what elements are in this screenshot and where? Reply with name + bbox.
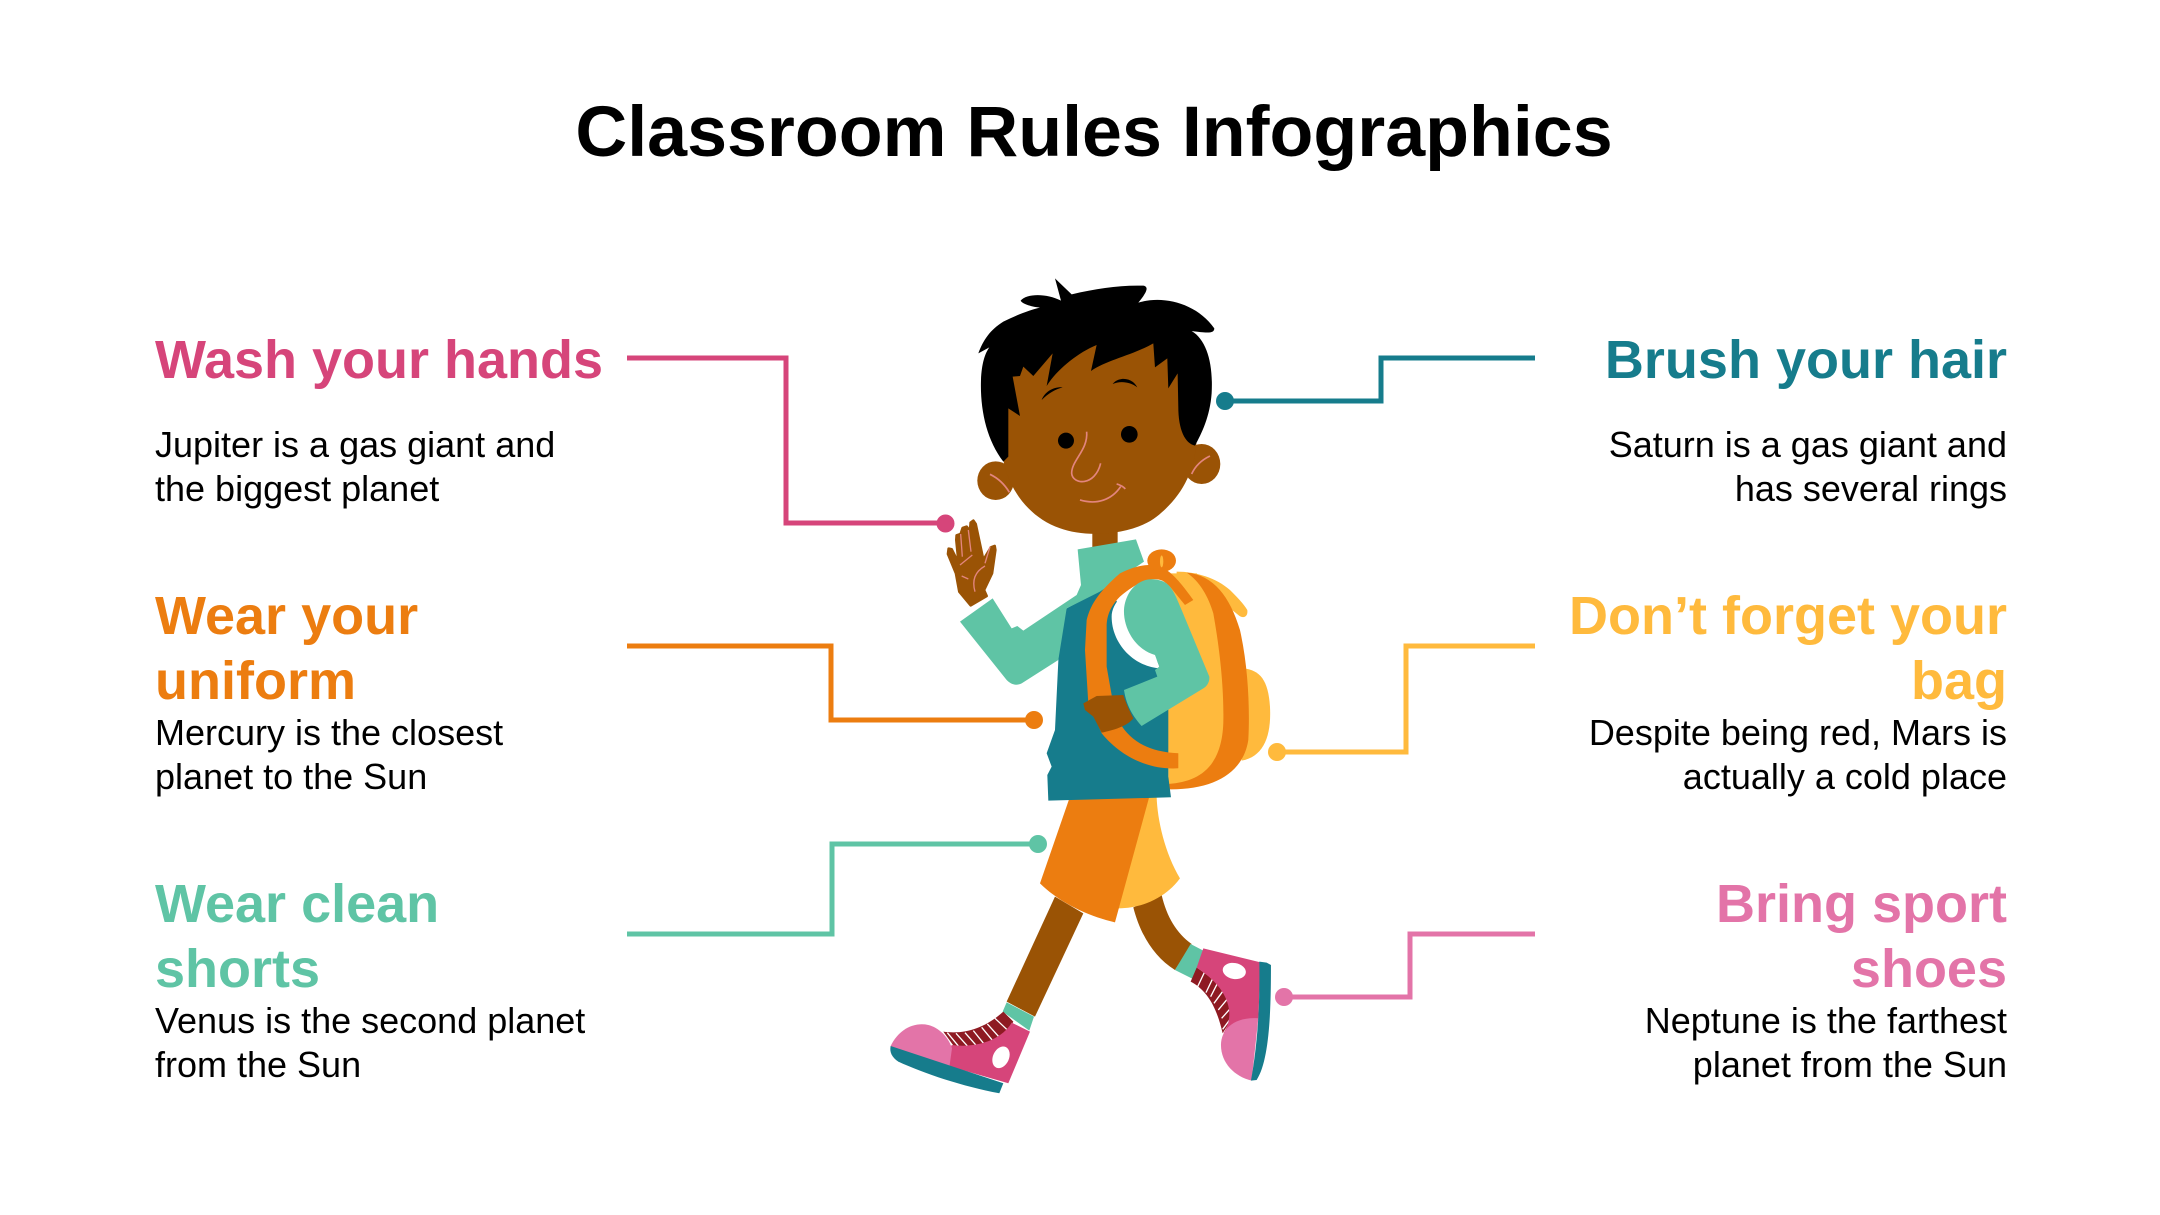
panel: wear your uniform — [155, 586, 503, 797]
text: mars: Despite being red, Mars is — [1589, 712, 2007, 753]
front socks — [1003, 1002, 1034, 1031]
illustration: walking boy with backpack — [890, 278, 1271, 1093]
panel: wear clean shorts — [155, 874, 585, 1085]
nose — [1072, 432, 1101, 482]
panel: wash your hands — [155, 330, 603, 509]
connector: uniform to vest — [627, 646, 1043, 729]
heading: brush your hair: Brush your hair — [1605, 330, 2007, 390]
heading: don't forget your bag: Don’t forget your — [1569, 586, 2007, 646]
back shoe — [1191, 948, 1271, 1081]
heading: wear clean shorts: shorts — [155, 939, 320, 999]
back leg — [1133, 895, 1192, 970]
connector: brush hair — [1216, 358, 1535, 410]
panel: bring sport shoes — [1645, 874, 2007, 1085]
text: saturn: Saturn is a gas giant and — [1609, 424, 2007, 465]
text: mercury: planet to the Sun — [155, 756, 427, 797]
front hand — [1083, 695, 1133, 733]
eyebrows — [1042, 379, 1137, 400]
face — [1003, 340, 1197, 534]
panel: don't forget your bag — [1569, 586, 2007, 797]
hair — [978, 278, 1214, 462]
eyes — [1058, 433, 1074, 449]
text: saturn: has several rings — [1735, 468, 2007, 509]
shorts: yellow panel — [1118, 797, 1180, 908]
front leg — [1007, 897, 1083, 1017]
ear lines — [990, 456, 1210, 492]
head — [977, 278, 1220, 534]
connector: bag — [1268, 646, 1535, 761]
connector: wash your hands to hand — [627, 358, 954, 532]
text: jupiter: the biggest planet — [155, 468, 439, 509]
bag inner panel — [1167, 573, 1224, 787]
heading: wear your uniform: uniform — [155, 651, 356, 711]
text: venus: from the Sun — [155, 1044, 361, 1085]
text: mercury: Mercury is the closest — [155, 712, 503, 753]
bag handle — [1147, 549, 1176, 572]
legs, shorts and shoes — [890, 797, 1271, 1093]
heading: wear clean shorts: Wear clean — [155, 874, 439, 934]
text: jupiter: Jupiter is a gas giant and — [155, 424, 555, 465]
front sleeve — [1124, 579, 1209, 726]
back arm and collar — [960, 539, 1144, 685]
backpack, torso and arms — [948, 521, 1270, 801]
front shoe — [890, 1012, 1030, 1093]
bag top flap — [1177, 572, 1247, 617]
mouth — [1080, 484, 1125, 502]
panel: brush your hair — [1605, 330, 2007, 509]
heading: wash your hands: Wash your hands — [155, 330, 603, 390]
connector: shoes — [1275, 934, 1535, 1006]
waving hand — [948, 521, 995, 605]
heading: bring sport shoes: shoes — [1851, 939, 2007, 999]
bag strap — [1085, 565, 1193, 768]
bag side pocket — [1242, 668, 1270, 761]
text: neptune: Neptune is the farthest — [1645, 1000, 2007, 1041]
neck — [1092, 527, 1118, 550]
title: Classroom Rules Infographics — [575, 92, 1613, 172]
shorts: orange panel — [1040, 797, 1149, 922]
connector: shorts — [627, 835, 1047, 934]
bag orange band — [1168, 573, 1249, 789]
text: neptune: planet from the Sun — [1693, 1044, 2007, 1085]
ears — [977, 461, 1014, 500]
vest — [1047, 587, 1171, 801]
back socks — [1175, 944, 1203, 980]
text: venus: Venus is the second planet — [155, 1000, 585, 1041]
text: mars: actually a cold place — [1683, 756, 2007, 797]
heading: don't forget your bag: bag — [1911, 651, 2007, 711]
heading: bring sport shoes: Bring sport — [1716, 874, 2007, 934]
heading: wear your uniform: Wear your — [155, 586, 418, 646]
underarm highlight — [1112, 579, 1160, 668]
